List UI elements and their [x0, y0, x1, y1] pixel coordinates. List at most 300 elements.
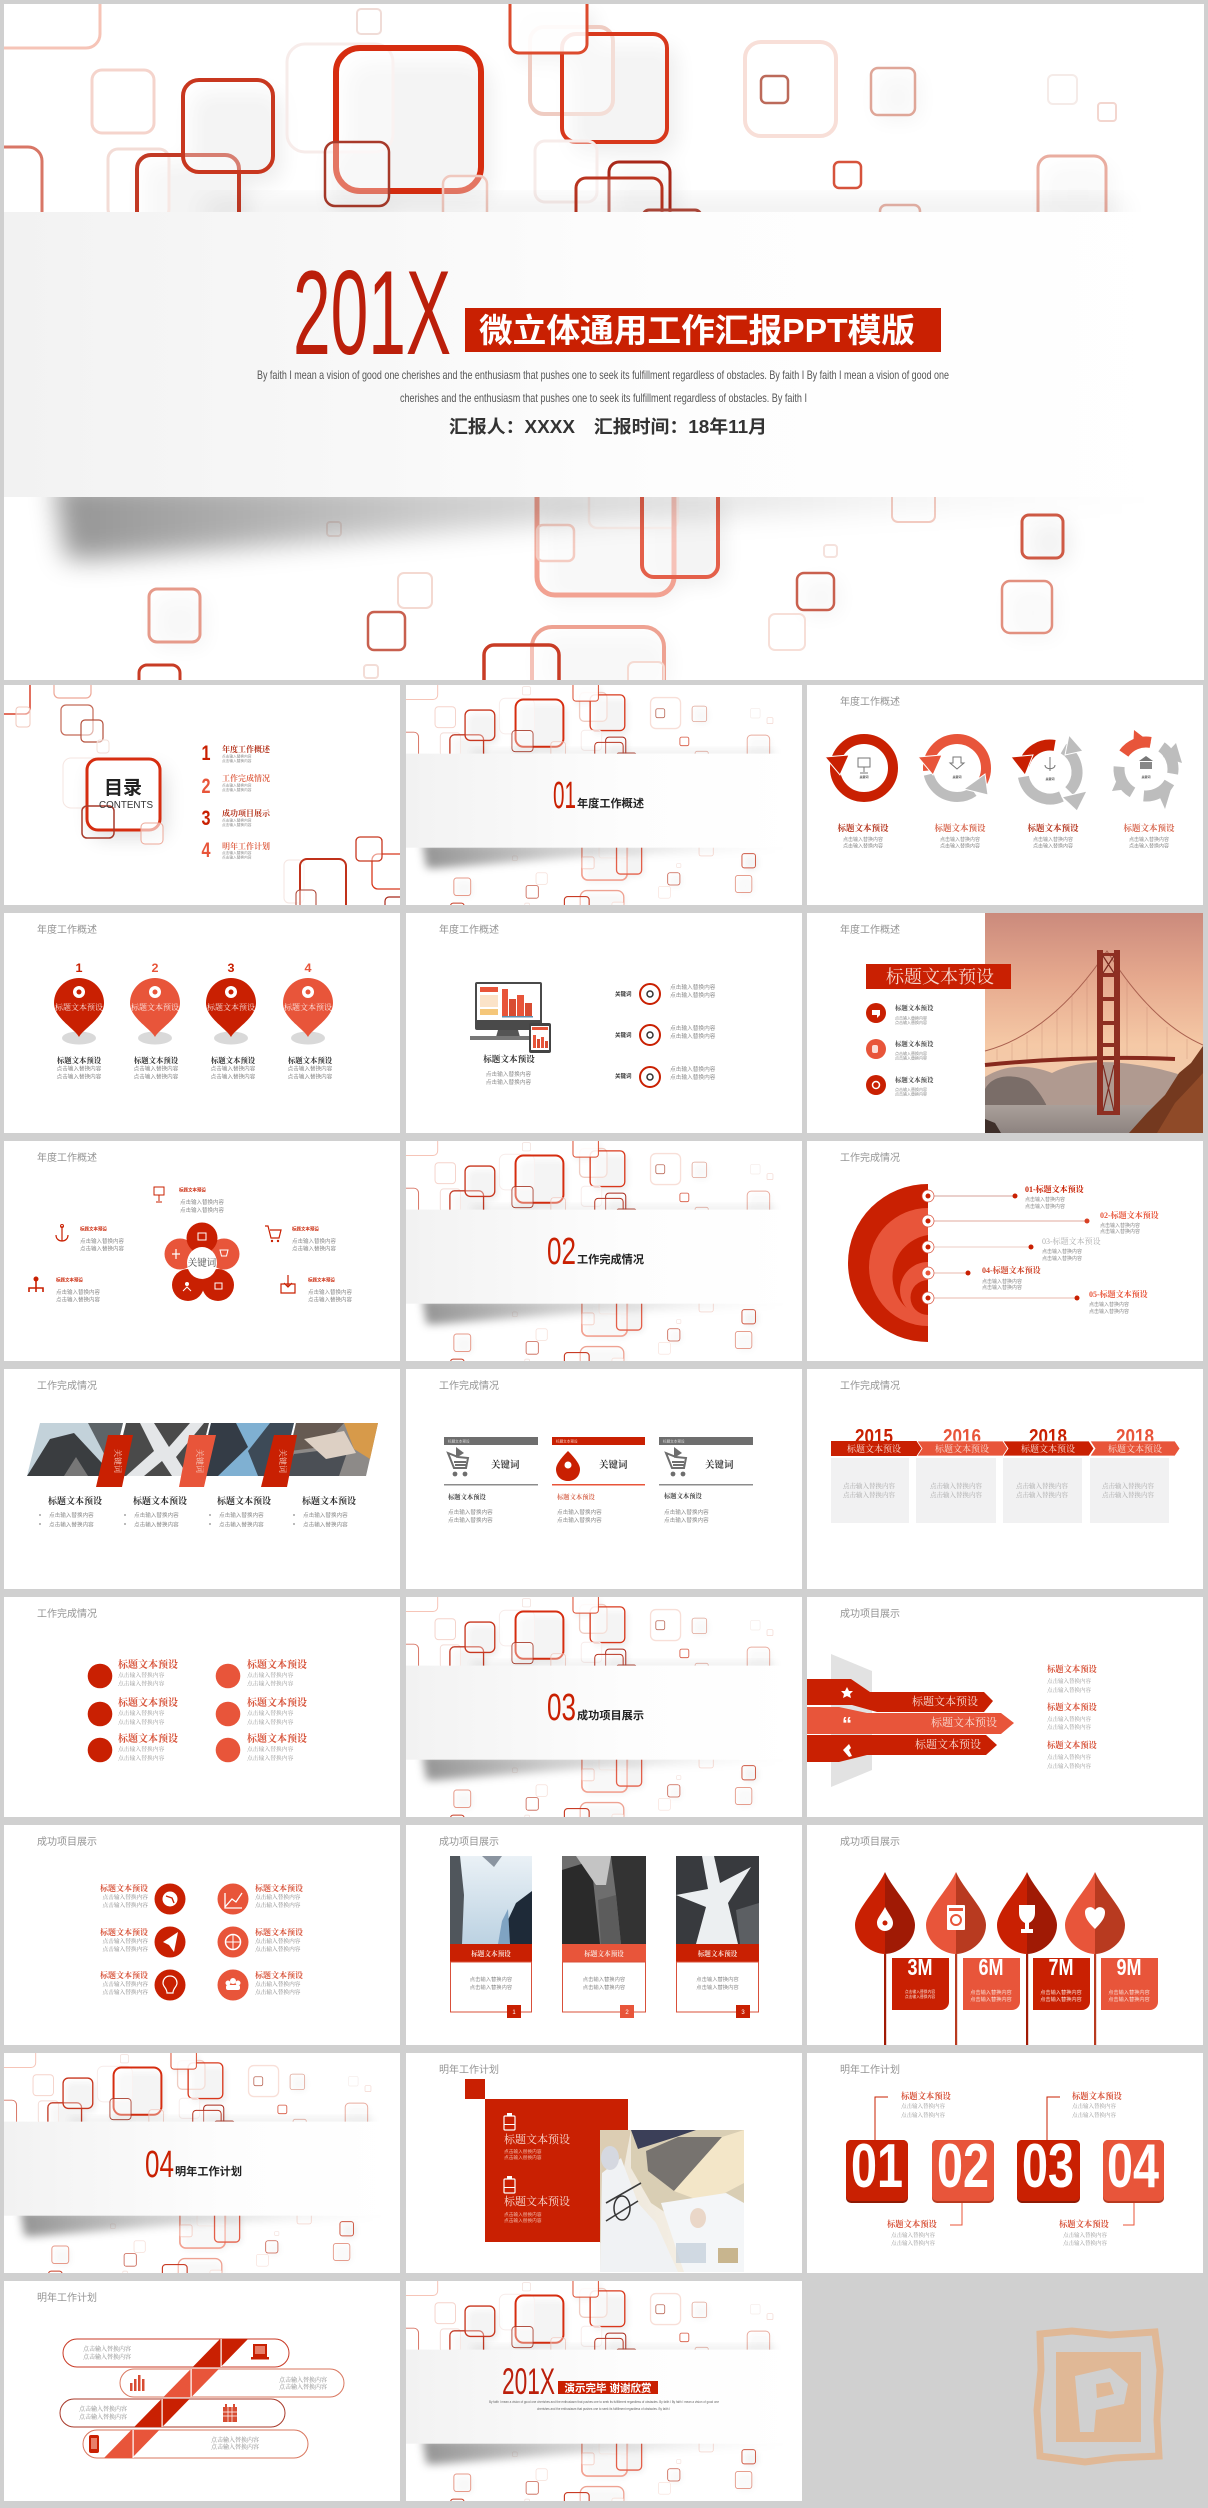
box 02: 02 — [937, 2132, 989, 2201]
slanted keyword bars: 关键词 — [278, 1449, 288, 1473]
column 3: 关键词 — [705, 1459, 734, 1471]
cover background pattern — [0, 0, 1204, 717]
column 3: 标题文本预设 — [663, 1438, 685, 1444]
cover reporter line: 汇报人：XXXX 汇报时间：18年11月 — [449, 416, 767, 437]
closing english text: cherishes and the enthusiasm that pushes one to seek its fulfillment regardless of obstacles. By faith I — [537, 2407, 670, 2411]
contents decoration bottom right — [284, 836, 400, 905]
callout right: 点击输入替换内容 — [292, 1244, 337, 1252]
box 01: 01 — [851, 2132, 903, 2201]
heading: 成功项目展示 — [840, 1608, 900, 1620]
right text — [1047, 1664, 1097, 1770]
pin 3 — [206, 961, 256, 1044]
list text: 标题文本预设 — [247, 1696, 307, 1709]
column 1: 点击输入替换内容 — [448, 1516, 493, 1524]
key item 1: 关键词 — [615, 990, 632, 998]
right text: 标题文本预设 — [255, 1970, 303, 1980]
card 2: 2 — [625, 2010, 629, 2016]
timeline item 3 — [922, 1236, 1101, 1262]
ring captions: 点击输入替换内容 — [940, 836, 980, 843]
device caption: 点击输入替换内容 — [486, 1070, 532, 1078]
panel: section 04 — [0, 2046, 400, 2288]
leaf 3 with card: 点击输入替换内容 — [1040, 1995, 1082, 2003]
leaf 1 with card: 点击输入替换内容 — [905, 1989, 935, 1994]
ring 3: 关键词 — [1045, 776, 1055, 781]
captions: 点击输入替换内容 — [49, 1511, 94, 1519]
list text: 标题文本预设 — [247, 1732, 307, 1745]
right text: 点击输入替换内容 — [255, 1988, 301, 1996]
years: 2018 — [1029, 1426, 1067, 1448]
leaf 4 with card: 点击输入替换内容 — [1108, 1988, 1150, 1996]
block item 1 — [504, 2113, 570, 2161]
callout top right: 点击输入替换内容 — [1072, 2111, 1117, 2119]
column 2: 点击输入替换内容 — [557, 1516, 602, 1524]
heading: 工作完成情况 — [840, 1379, 900, 1392]
leaf 2 with card: 点击输入替换内容 — [970, 1988, 1012, 1996]
callout bottom left: 点击输入替换内容 — [56, 1296, 101, 1304]
column 1: 关键词 — [491, 1459, 520, 1471]
right text — [255, 1883, 303, 1996]
callout top left: 点击输入替换内容 — [901, 2102, 946, 2110]
contents main box — [82, 759, 163, 844]
ring 3 — [1011, 735, 1087, 811]
card 1 — [450, 1856, 532, 2018]
panel: circular arrows — [807, 685, 1203, 905]
right icons — [218, 1884, 248, 2000]
pin captions: 点击输入替换内容 — [134, 1072, 179, 1080]
panel: closing slide — [396, 2274, 802, 2508]
block item 1: 点击输入替换内容 — [504, 2148, 542, 2155]
left text: 点击输入替换内容 — [102, 1988, 148, 1996]
semicircle rings — [848, 1184, 928, 1342]
cover title banner: 微立体通用工作汇报PPT模版 — [479, 312, 915, 349]
pill 4: 点击输入替换内容 — [211, 2436, 259, 2444]
contents item list: 明年工作计划 — [222, 841, 270, 851]
leaf 2 with card — [926, 1872, 1020, 2045]
ring captions: 标题文本预设 — [1123, 823, 1175, 833]
left text: 点击输入替换内容 — [102, 1901, 148, 1909]
captions: 点击输入替换内容 — [134, 1511, 179, 1519]
contents item list: 2 — [202, 775, 210, 798]
panel: contents slide — [4, 685, 400, 905]
list item 1: 标题文本预设 — [895, 1003, 934, 1012]
panel: numbered boxes — [807, 2053, 1203, 2273]
callout bottom left — [29, 1276, 101, 1304]
card 1: 点击输入替换内容 — [470, 1983, 513, 1991]
callout top left: 标题文本预设 — [901, 2091, 951, 2101]
leaf 2 with card: 点击输入替换内容 — [970, 1995, 1012, 2003]
pill 4: 点击输入替换内容 — [211, 2443, 259, 2451]
icon: monitor and phone — [470, 982, 551, 1053]
section heading 02 — [547, 1231, 644, 1273]
pin 2: 2 — [152, 961, 159, 975]
panel: year timeline — [807, 1369, 1203, 1589]
ribbon 2: 标题文本预设 — [931, 1715, 997, 1729]
timeline item 5: 点击输入替换内容 — [1089, 1308, 1129, 1315]
cover year 201X: 201X — [293, 246, 451, 380]
timeline item 5 — [922, 1289, 1148, 1315]
list item 3: 点击输入替换内容 — [895, 1090, 927, 1096]
callout left: 点击输入替换内容 — [80, 1244, 125, 1252]
card 1: 标题文本预设 — [471, 1949, 511, 1958]
callout left — [56, 1224, 125, 1252]
years — [855, 1426, 1154, 1448]
section background pattern — [396, 1134, 802, 1376]
column 3: 标题文本预设 — [664, 1491, 702, 1500]
card 1: 1 — [512, 2010, 516, 2016]
pin 4: 4 — [304, 961, 312, 975]
right text: 点击输入替换内容 — [1047, 1723, 1092, 1731]
section heading 04 — [145, 2144, 242, 2186]
card 1: 点击输入替换内容 — [470, 1975, 513, 1983]
section heading 04: 明年工作计划 — [175, 2164, 242, 2178]
callout bottom right: 点击输入替换内容 — [1063, 2239, 1108, 2247]
pill 1: 点击输入替换内容 — [83, 2345, 131, 2353]
right text: 点击输入替换内容 — [1047, 1686, 1092, 1694]
callout bottom right — [281, 1275, 353, 1304]
callout bottom left: 标题文本预设 — [887, 2219, 937, 2229]
slanted keyword bars: 关键词 — [113, 1449, 123, 1473]
section background pattern — [396, 678, 802, 920]
grey columns — [831, 1458, 1169, 1523]
timeline item 3: 03-标题文本预设 — [1042, 1236, 1101, 1246]
column 1: 点击输入替换内容 — [448, 1508, 493, 1516]
panel: cover slide — [0, 0, 1204, 717]
list text: 点击输入替换内容 — [247, 1718, 294, 1726]
arrow ribbons — [831, 1441, 1180, 1456]
card 2: 点击输入替换内容 — [583, 1975, 626, 1983]
panel: section 03 — [396, 1590, 802, 1832]
list item 2: 点击输入替换内容 — [895, 1054, 927, 1060]
left text: 点击输入替换内容 — [102, 1937, 148, 1945]
list text: 点击输入替换内容 — [118, 1745, 165, 1753]
pin 1: 1 — [76, 961, 83, 975]
list item 3 — [866, 1075, 934, 1096]
contents item list: 点击输入替换内容 — [222, 787, 252, 792]
left icons — [154, 1884, 186, 2000]
block item 2: 点击输入替换内容 — [504, 2211, 542, 2218]
callout bottom right: 点击输入替换内容 — [308, 1288, 353, 1296]
list item 3: 标题文本预设 — [895, 1075, 934, 1084]
section heading 02: 工作完成情况 — [577, 1252, 644, 1266]
photo strip — [27, 1423, 378, 1476]
callout top right: 点击输入替换内容 — [1072, 2102, 1117, 2110]
column text: 点击输入替换内容 — [930, 1481, 982, 1490]
pin 2 — [130, 961, 180, 1044]
contents item list: 点击输入替换内容 — [222, 854, 252, 860]
heading: 年度工作概述 — [37, 1151, 97, 1164]
flower — [164, 1222, 240, 1301]
pin captions: 点击输入替换内容 — [288, 1072, 333, 1080]
section heading 04: 04 — [145, 2144, 174, 2186]
list text: 点击输入替换内容 — [118, 1709, 165, 1717]
column 2: 标题文本预设 — [557, 1492, 595, 1501]
ring captions: 点击输入替换内容 — [1033, 842, 1073, 850]
list text: 标题文本预设 — [247, 1658, 307, 1671]
heading: 年度工作概述 — [439, 923, 499, 936]
callout top: 标题文本预设 — [179, 1186, 206, 1194]
callout left: 点击输入替换内容 — [80, 1237, 125, 1245]
column 2: 标题文本预设 — [556, 1438, 578, 1444]
arrow ribbons: 标题文本预设 — [935, 1443, 989, 1454]
circles — [88, 1664, 240, 1762]
device caption: 标题文本预设 — [483, 1053, 535, 1064]
list text: 标题文本预设 — [118, 1658, 178, 1671]
column 1: 标题文本预设 — [448, 1438, 470, 1444]
device caption: 点击输入替换内容 — [486, 1078, 532, 1086]
timeline item 5: 点击输入替换内容 — [1089, 1301, 1129, 1308]
pin 3: 3 — [228, 961, 235, 975]
panel: flower diagram — [4, 1141, 400, 1361]
pin 3: 标题文本预设 — [207, 1002, 255, 1012]
key item 2: 点击输入替换内容 — [670, 1024, 716, 1032]
contents item list: 点击输入替换内容 — [222, 782, 252, 788]
leaf 4 with card: 9M — [1116, 1954, 1142, 1980]
callout top: 点击输入替换内容 — [180, 1206, 225, 1214]
callout bottom right: 标题文本预设 — [1059, 2219, 1109, 2229]
key item 3: 点击输入替换内容 — [670, 1073, 716, 1081]
slanted keyword bars: 关键词 — [195, 1449, 205, 1473]
left text — [100, 1883, 148, 1996]
column 3: 点击输入替换内容 — [664, 1516, 709, 1524]
column 1 — [444, 1437, 538, 1524]
pin captions: 标题文本预设 — [211, 1056, 256, 1065]
heading: 明年工作计划 — [439, 2063, 499, 2076]
heading: 年度工作概述 — [37, 923, 97, 936]
key item 2: 关键词 — [615, 1031, 632, 1039]
timeline item 1: 01-标题文本预设 — [1025, 1184, 1084, 1194]
callout top right: 标题文本预设 — [1072, 2091, 1122, 2101]
leaf 4 with card: 点击输入替换内容 — [1108, 1995, 1150, 2003]
captions: 点击输入替换内容 — [219, 1511, 264, 1519]
right text: 标题文本预设 — [255, 1927, 303, 1937]
callout bottom right: 点击输入替换内容 — [1063, 2231, 1108, 2239]
column 2: 点击输入替换内容 — [557, 1508, 602, 1516]
heading: 工作完成情况 — [840, 1151, 900, 1164]
timeline item 2 — [922, 1210, 1159, 1235]
grey backing — [831, 1654, 872, 1787]
heading: 成功项目展示 — [37, 1836, 97, 1848]
pill 2: 点击输入替换内容 — [279, 2376, 327, 2384]
leaf 3 with card: 7M — [1048, 1954, 1074, 1980]
key item 3 — [615, 1065, 716, 1087]
list text: 点击输入替换内容 — [247, 1671, 294, 1679]
captions: 标题文本预设 — [133, 1495, 187, 1506]
ring captions: 点击输入替换内容 — [1033, 836, 1073, 843]
left text: 点击输入替换内容 — [102, 1980, 148, 1988]
contents main box: CONTENTS — [99, 800, 153, 811]
column text: 点击输入替换内容 — [1102, 1481, 1154, 1490]
ribbon 3 — [807, 1735, 997, 1762]
list item 3: 点击输入替换内容 — [895, 1086, 927, 1092]
contents item list: 点击输入替换内容 — [222, 822, 252, 827]
timeline item 2: 点击输入替换内容 — [1100, 1222, 1140, 1229]
list text: 点击输入替换内容 — [118, 1754, 165, 1762]
title banner — [866, 964, 1011, 989]
captions: 标题文本预设 — [217, 1495, 271, 1506]
card 3: 3 — [741, 2010, 745, 2016]
watermark stamp — [1037, 2331, 1160, 2462]
contents item list: 3 — [202, 807, 210, 830]
list item 1 — [866, 1003, 934, 1025]
list text: 点击输入替换内容 — [118, 1718, 165, 1726]
right text: 点击输入替换内容 — [255, 1901, 301, 1909]
block item 2 — [504, 2176, 570, 2224]
panel: red block with photo — [406, 2053, 802, 2273]
pin captions: 标题文本预设 — [288, 1056, 333, 1065]
contents item list: 点击输入替换内容 — [222, 850, 252, 855]
list text: 标题文本预设 — [118, 1696, 178, 1709]
callout right — [265, 1226, 337, 1252]
callout bottom right: 点击输入替换内容 — [308, 1296, 353, 1304]
heading: 工作完成情况 — [37, 1607, 97, 1620]
closing english text: By faith I mean a vision of good one cherishes and the enthusiasm that pushes one to seek its fulfillment regardless of obstacles. By faith I By faith I mean a vision of good one — [489, 2400, 719, 2404]
flower: 关键词 — [188, 1257, 217, 1269]
ribbon 2: “ — [842, 1714, 852, 1736]
captions: 点击输入替换内容 — [303, 1520, 348, 1528]
panel: icon circles — [4, 1825, 400, 2045]
column text: 点击输入替换内容 — [1016, 1481, 1068, 1490]
section heading 02: 02 — [547, 1231, 576, 1273]
box 03: 03 — [1022, 2132, 1074, 2201]
ring captions: 标题文本预设 — [1027, 823, 1079, 833]
panel: semicircle timeline — [807, 1141, 1203, 1361]
heading: 工作完成情况 — [439, 1379, 499, 1392]
key item 1: 点击输入替换内容 — [670, 991, 716, 999]
box 04: 04 — [1107, 2132, 1159, 2201]
arrow ribbons: 标题文本预设 — [847, 1443, 901, 1454]
contents decoration top left — [4, 685, 110, 808]
captions: 点击输入替换内容 — [134, 1520, 179, 1528]
callout bottom left — [887, 2203, 962, 2247]
key item 2 — [615, 1024, 716, 1045]
callout right: 标题文本预设 — [292, 1226, 319, 1232]
captions: 标题文本预设 — [302, 1495, 356, 1506]
section heading 01: 01 — [553, 775, 576, 817]
callout bottom right: 标题文本预设 — [308, 1276, 335, 1284]
pin captions — [57, 1056, 333, 1080]
cover english text: By faith I mean a vision of good one cherishes and the enthusiasm that pushes one to seek its fulfillment regardless of obstacles. By faith I By faith I mean a vision of good one — [257, 368, 949, 382]
ring captions: 点击输入替换内容 — [843, 842, 883, 850]
card 3 — [676, 1856, 759, 2018]
pin captions: 点击输入替换内容 — [288, 1064, 333, 1072]
list item 2: 标题文本预设 — [895, 1039, 934, 1048]
photo: desk with laptop — [600, 2130, 744, 2272]
contents main box: 目录 — [104, 777, 142, 799]
column text: 点击输入替换内容 — [1016, 1490, 1068, 1499]
list text: 点击输入替换内容 — [247, 1709, 294, 1717]
card 3: 标题文本预设 — [698, 1949, 738, 1958]
ring 4: 关键词 — [1141, 774, 1151, 779]
captions: 点击输入替换内容 — [49, 1520, 94, 1528]
pill 3 — [60, 2399, 285, 2427]
column 1: 标题文本预设 — [448, 1492, 486, 1501]
key item 3: 关键词 — [615, 1072, 632, 1080]
callout bottom right — [1059, 2203, 1134, 2247]
column text: 点击输入替换内容 — [843, 1481, 896, 1490]
contents item list: 点击输入替换内容 — [222, 818, 252, 822]
callout left: 标题文本预设 — [80, 1226, 107, 1232]
heading: 年度工作概述 — [840, 695, 900, 708]
photo: golden gate bridge — [985, 913, 1203, 1133]
section heading 03: 03 — [547, 1687, 576, 1729]
ring 1 — [825, 739, 893, 797]
pin captions: 点击输入替换内容 — [211, 1072, 256, 1080]
captions: 点击输入替换内容 — [219, 1520, 264, 1528]
list text: 点击输入替换内容 — [247, 1680, 294, 1688]
ring captions: 点击输入替换内容 — [940, 842, 980, 850]
right text: 标题文本预设 — [1047, 1740, 1097, 1750]
list text: 点击输入替换内容 — [118, 1680, 165, 1688]
section heading 01: 年度工作概述 — [577, 796, 644, 810]
right text: 点击输入替换内容 — [1047, 1762, 1092, 1770]
heading: 年度工作概述 — [840, 923, 900, 936]
pin captions: 标题文本预设 — [134, 1056, 179, 1065]
block item 1: 标题文本预设 — [504, 2132, 570, 2146]
heading: 成功项目展示 — [439, 1836, 499, 1848]
ring captions: 点击输入替换内容 — [1129, 836, 1169, 843]
key item 1 — [615, 983, 716, 1004]
card 3: 点击输入替换内容 — [696, 1975, 739, 1983]
ring 2: 关键词 — [952, 774, 962, 779]
card 2: 标题文本预设 — [584, 1949, 624, 1958]
years: 2018 — [1116, 1426, 1154, 1448]
timeline item 1 — [922, 1184, 1084, 1210]
list text: 点击输入替换内容 — [118, 1671, 165, 1679]
pin captions: 点击输入替换内容 — [57, 1072, 102, 1080]
right text: 标题文本预设 — [255, 1883, 303, 1893]
pin 4: 标题文本预设 — [284, 1002, 332, 1012]
timeline item 3: 点击输入替换内容 — [1042, 1248, 1082, 1255]
contents item list: 4 — [202, 839, 211, 862]
right text: 点击输入替换内容 — [1047, 1677, 1092, 1685]
contents item list: 年度工作概述 — [222, 744, 271, 754]
contents item list: 工作完成情况 — [222, 773, 270, 783]
years: 2016 — [943, 1426, 981, 1448]
contents item list: 成功项目展示 — [222, 808, 271, 818]
column 2 — [552, 1437, 645, 1524]
contents item list: 1 — [202, 742, 211, 765]
pill 3: 点击输入替换内容 — [79, 2413, 127, 2421]
pill 3: 点击输入替换内容 — [79, 2405, 127, 2413]
left text: 标题文本预设 — [100, 1883, 148, 1893]
pin 2: 标题文本预设 — [131, 1002, 179, 1012]
heading: 明年工作计划 — [37, 2291, 97, 2304]
ring 2 — [918, 734, 991, 802]
pin captions: 标题文本预设 — [57, 1056, 102, 1065]
key item 3: 点击输入替换内容 — [670, 1065, 716, 1073]
callout right: 点击输入替换内容 — [292, 1237, 337, 1245]
ring captions: 点击输入替换内容 — [843, 836, 883, 843]
list text: 点击输入替换内容 — [247, 1745, 294, 1753]
panel: devices — [406, 913, 802, 1133]
leaf 1 with card — [855, 1872, 949, 2045]
pin 1: 标题文本预设 — [55, 1002, 103, 1012]
pill 2: 点击输入替换内容 — [279, 2383, 327, 2391]
timeline item 3: 点击输入替换内容 — [1042, 1255, 1082, 1262]
leaf 4 with card — [1065, 1872, 1158, 2045]
pin 4 — [283, 961, 333, 1044]
panel: section 01 — [396, 678, 802, 920]
card 2: 点击输入替换内容 — [583, 1983, 626, 1991]
ring captions: 标题文本预设 — [934, 823, 986, 833]
captions: 点击输入替换内容 — [303, 1511, 348, 1519]
slanted keyword bars — [96, 1435, 297, 1487]
captions: 标题文本预设 — [48, 1495, 102, 1506]
column text: 点击输入替换内容 — [930, 1490, 982, 1499]
right text: 点击输入替换内容 — [255, 1893, 301, 1901]
list text — [118, 1658, 307, 1762]
panel: pills with diagonal — [4, 2281, 400, 2501]
